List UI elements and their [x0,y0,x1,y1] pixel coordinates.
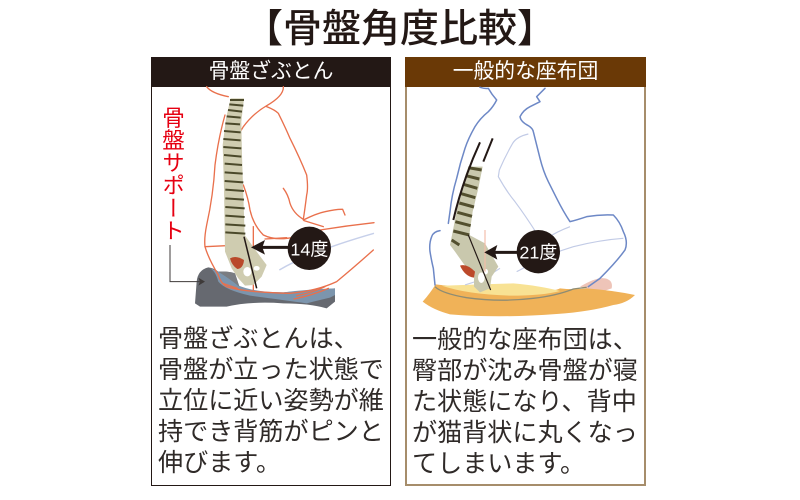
back reference lines [453,138,493,220]
illustration: seated posture on pelvis cushion [170,87,374,308]
body outline [430,87,626,287]
thigh line [465,134,623,285]
title: 【骨盤角度比較】 [244,8,556,51]
illustration: seated posture on ordinary cushion [423,87,635,316]
description: pelvis cushion: 立位に近い姿勢が維 [158,387,384,415]
description: ordinary cushion [412,326,638,478]
leader line to cushion [170,245,205,286]
arrow [251,240,290,255]
description: pelvis cushion: 伸びます。 [158,449,281,477]
badge: 21 degrees: 21度 [519,243,557,263]
arrow [484,245,518,260]
body outline [205,87,374,299]
panel: ordinary cushion [405,57,646,486]
panel header: ordinary cushion: 一般的な座布団 [453,60,598,83]
thigh line [279,233,374,270]
angle line [468,235,491,290]
pink reference line [483,230,487,272]
description: pelvis cushion: 骨盤ざぶとんは、 [158,324,359,352]
cushion: pelvis support [195,267,335,308]
description: ordinary cushion: 臀部が沈み骨盤が寝 [412,357,638,385]
panel header: pelvis cushion: 骨盤ざぶとん [209,60,333,83]
spine [223,98,267,286]
badge: 21 degrees [517,230,560,273]
panel header: ordinary cushion [405,57,646,87]
description: ordinary cushion: が猫背状に丸くなっ [412,419,638,447]
label: pelvis support: 骨盤サポート [159,106,184,242]
cushion: ordinary [423,278,635,316]
angle line [244,237,257,288]
description: ordinary cushion: 一般的な座布団は、 [412,326,638,354]
panel header: pelvis cushion [151,57,391,87]
badge: 14 degrees [288,227,331,270]
panel: pelvis cushion [151,57,391,486]
description: pelvis cushion [158,324,384,477]
description: pelvis cushion: 持でき背筋がピンと [158,418,384,446]
description: ordinary cushion: た状態になり、背中 [412,388,637,416]
description: ordinary cushion: てしまいます。 [412,450,585,478]
description: pelvis cushion: 骨盤が立った状態で [158,356,384,384]
spine [450,167,498,292]
badge: 14 degrees: 14度 [290,239,328,259]
